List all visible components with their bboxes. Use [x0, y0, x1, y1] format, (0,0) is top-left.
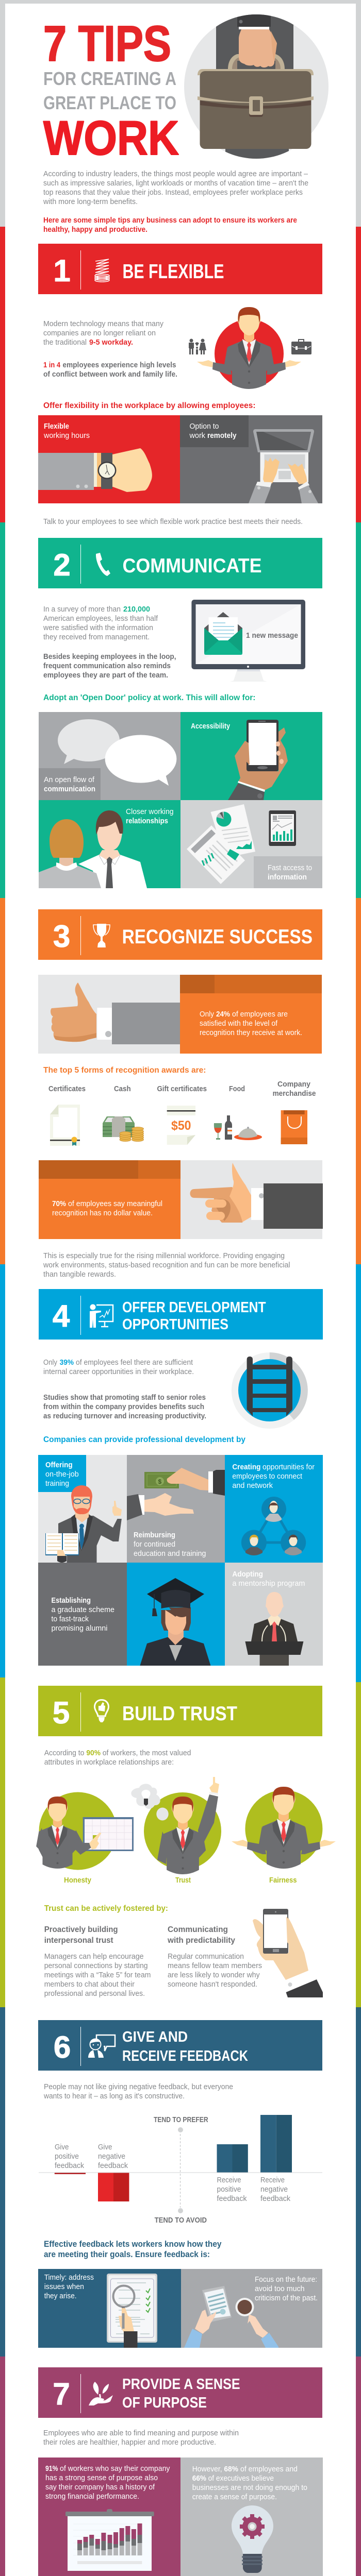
- text: negative feedback: wants to hear it – as long as it's constructive.: [43, 2092, 185, 2100]
- labels: honesty, trust, fairness: Fairness: [269, 1876, 297, 1885]
- text: 90% of workers: attributes in workplace relationships are:: [44, 1758, 174, 1767]
- panel: connect and network: and network: [232, 1482, 273, 1490]
- text: proactively building: Managers can help encourage: [44, 1953, 144, 1961]
- panel: fast access to information: Fast access to: [268, 864, 312, 872]
- text: survey: In a survey of more than: [43, 605, 121, 614]
- chart: feedback preferences: Receive: [217, 2176, 241, 2184]
- panel: open flow of communication: [39, 712, 180, 800]
- heading: effective feedback: [44, 2239, 222, 2259]
- panel: 70% stat: 70%: [52, 1200, 66, 1208]
- text: proactively building: personal connections by starting: [44, 1962, 148, 1970]
- panel: 68% stat and bulb: 66%: [192, 2475, 206, 2483]
- section 5 banner: [38, 1686, 322, 1736]
- intro text: [43, 170, 308, 206]
- text: millennial workforce: This is especially true for the rising millennial workforce. Providing engaging: [43, 1252, 285, 1260]
- panel: reimbursing: for continued: [134, 1540, 175, 1549]
- panel: 24% stat: Only: [200, 1010, 215, 1019]
- panel: 24% stat: 24%: [216, 1010, 230, 1019]
- text: 39% stat: of employees feel there are sufficient: [76, 1359, 193, 1367]
- section 2 banner: [38, 538, 322, 588]
- section 3: recognize success: [38, 909, 323, 1279]
- award labels: [48, 1080, 316, 1098]
- heading: open door policy: Adopt an 'Open Door' policy at work. This will allow for:: [43, 693, 256, 702]
- panel: 68% stat and bulb: businesses are not doing enough to: [192, 2484, 307, 2492]
- section 1 banner: 1: [53, 253, 71, 288]
- panel: accessibility: [180, 712, 322, 800]
- panel: 70% stat: recognition has no dollar value.: [52, 1209, 153, 1217]
- text: proactively building: members to chat about their: [44, 1980, 135, 1989]
- text: 39% stat: 39%: [60, 1359, 74, 1367]
- panel: timely: Timely: address: [44, 2274, 94, 2282]
- icon: certificate: [50, 1105, 80, 1146]
- icon: gift certificate: [167, 1106, 195, 1145]
- text: 1 in 4 employees: 1 in 4: [43, 361, 60, 369]
- panel: closer working relationships: relationships: [126, 817, 168, 825]
- award labels: Cash: [114, 1085, 131, 1093]
- panel: graduate scheme: to fast-track: [52, 1615, 89, 1623]
- panel: 24% stat: recognition they receive at work.: [200, 1029, 302, 1037]
- panel: focus on the future: [181, 2269, 322, 2348]
- title: WORK: [43, 111, 179, 165]
- illustration: monitor with message: 1 new message: [246, 632, 298, 640]
- text: besides keeping employees: frequent communication also reminds: [43, 662, 171, 670]
- chart: feedback preferences: negative: [260, 2185, 288, 2194]
- panel: closer working relationships: Closer working: [126, 808, 174, 816]
- panel: reimbursing: [127, 1455, 225, 1563]
- panel: thumbs up: [38, 975, 180, 1054]
- heading: offer flexibility: Offer flexibility in the workplace by allowing employees:: [43, 401, 256, 410]
- illustration: ladder in circle: [232, 1352, 308, 1429]
- panel: reimbursing: education and training: [134, 1550, 206, 1558]
- text: communicating with predictability: are less likely to wonder why: [168, 1971, 260, 1979]
- panel: work remotely: [180, 415, 322, 503]
- text: millennial workforce: work environments, status-based recognition and fun can be more beneficial: [43, 1261, 290, 1269]
- panel: focus on the future: avoid too much: [255, 2285, 305, 2293]
- section 7: provide a sense of purpose: [38, 2367, 323, 2576]
- text: survey: 210,000: [123, 605, 150, 614]
- chart: feedback preferences: feedback: [55, 2162, 85, 2170]
- section 3 banner: 3: [53, 919, 70, 954]
- section 2 banner: 2: [53, 548, 71, 582]
- panel: mentorship program: Adopting: [232, 1570, 263, 1579]
- panel: connect and network: Creating: [232, 1463, 260, 1471]
- panel: 70% stat: of employees say meaningful: [68, 1200, 162, 1208]
- text: modern technology: [43, 320, 164, 347]
- text: talk to your employees: Talk to your employees to see which flexible work practice best meets their needs.: [43, 518, 303, 526]
- section 5: build trust: [36, 1686, 336, 1998]
- text: communicating with predictability: Regular communication: [168, 1953, 244, 1961]
- text: modern technology: 9-5 workday.: [89, 338, 133, 347]
- panel: 91% stat and chart: of workers who say their company: [60, 2465, 170, 2473]
- illustration: trust: [131, 1777, 221, 1874]
- panel: 24% stat: of employees are: [232, 1010, 288, 1019]
- panel: on-the-job training: Offering: [45, 1461, 73, 1469]
- panel: 91% stat and chart: [38, 2458, 180, 2576]
- text: survey: [43, 605, 158, 641]
- icon: cash and coins: [103, 1116, 143, 1142]
- text: studies show: from within the company provides benefits such: [43, 1403, 204, 1411]
- panel: focus on the future: Focus on the future:: [255, 2276, 317, 2284]
- text: 39% stat: internal career opportunities in their workplace.: [43, 1368, 194, 1376]
- text: meaning and purpose: [43, 2429, 239, 2447]
- panel: closer working relationships: [39, 800, 180, 888]
- text: communicating with predictability: with predictability: [167, 1936, 235, 1945]
- section 4 banner: OPPORTUNITIES: [122, 1316, 228, 1333]
- text: modern technology: Modern technology means that many: [43, 320, 164, 328]
- panel: fast access to information: information: [268, 873, 307, 882]
- illustration: hand holding phone: [253, 1909, 323, 1997]
- section 2: communicate: [38, 538, 322, 888]
- award labels: Gift certificates: [157, 1085, 207, 1093]
- chart: feedback preferences: Give: [98, 2143, 112, 2151]
- chart: feedback preferences: TEND TO PREFER: [154, 2116, 208, 2124]
- section 7 banner: 7: [53, 2377, 70, 2411]
- text: millennial workforce: than tangible rewards.: [43, 1270, 116, 1279]
- heading: top 5 forms of recognition: The top 5 forms of recognition awards are:: [43, 1066, 206, 1075]
- text: proactively building: [44, 1925, 151, 1998]
- award labels: merchandise: [273, 1090, 316, 1098]
- panel: 91% stat and chart: say their company has a history of: [45, 2483, 155, 2492]
- panel: on-the-job training: [38, 1455, 127, 1563]
- text: studies show: Studies show that promoting staff to senior roles: [43, 1394, 206, 1402]
- panel: graduate scheme: [38, 1563, 127, 1666]
- text: studies show: [43, 1394, 206, 1420]
- section 1 banner: [38, 244, 322, 294]
- section 7 banner: PROVIDE A SENSE: [122, 2376, 240, 2393]
- illustration: monitor with message: [191, 600, 305, 682]
- panel: pointing hand: [180, 1160, 323, 1239]
- text: communicating with predictability: Communicating: [168, 1925, 228, 1934]
- panel: flexible working hours: Flexible: [44, 422, 69, 431]
- panel: timely: [38, 2269, 181, 2348]
- section 6 banner: RECEIVE FEEDBACK: [122, 2048, 248, 2064]
- panel: graduate scheme: a graduate scheme: [52, 1606, 114, 1614]
- section 4: offer development opportunities: [38, 1289, 323, 1666]
- panel: on-the-job training: training: [45, 1480, 69, 1488]
- panel: 68% stat and bulb: of employees and: [240, 2465, 298, 2473]
- panel: fast access to information: [180, 800, 322, 888]
- panel: 91% stat and chart: strong financial performance.: [45, 2493, 139, 2501]
- section 4 banner: OFFER DEVELOPMENT: [122, 1299, 266, 1316]
- chart: feedback preferences: feedback: [260, 2195, 291, 2203]
- text: 39% stat: Only: [43, 1359, 58, 1367]
- icon: family: [189, 339, 206, 354]
- text: communicating with predictability: someone hasn't responded.: [168, 1980, 257, 1989]
- text: negative feedback: [43, 2083, 233, 2100]
- labels: honesty, trust, fairness: Honesty: [64, 1876, 91, 1885]
- section 4 banner: [39, 1289, 323, 1340]
- panel: timely: they arise.: [44, 2292, 77, 2300]
- text: 90% of workers: 90%: [86, 1749, 101, 1757]
- labels: honesty, trust, fairness: Trust: [175, 1876, 191, 1885]
- text: 1 in 4 employees: employees experience high levels: [63, 361, 176, 369]
- panel: reimbursing: $: [158, 1478, 162, 1485]
- intro text: with more long-term benefits.: [43, 198, 138, 206]
- chart: feedback preferences: positive: [217, 2185, 241, 2194]
- chart: feedback preferences: Give: [55, 2143, 69, 2151]
- text: studies show: as reducing turnover and increasing productivity.: [43, 1412, 206, 1420]
- intro highlight: healthy, happy and productive.: [43, 226, 147, 234]
- section 1: be flexible: [38, 244, 322, 526]
- icon: gift certificate: $50: [171, 1118, 191, 1133]
- section 6 banner: [38, 2020, 322, 2071]
- text: 1 in 4 employees: of conflict between work and family life.: [43, 370, 177, 379]
- section 7 banner: OF PURPOSE: [122, 2395, 207, 2411]
- panel: 68% stat and bulb: of executives believe: [208, 2475, 274, 2483]
- chart: feedback preferences: negative: [98, 2153, 125, 2161]
- section 3 banner: RECOGNIZE SUCCESS: [122, 926, 313, 948]
- icon: shopping bag: [281, 1110, 307, 1144]
- panel: open flow of communication: communication: [44, 785, 95, 793]
- text: communicating with predictability: [167, 1925, 262, 1989]
- illustration: fairness: [232, 1787, 336, 1869]
- section 3 banner: [38, 909, 322, 960]
- laptop: [253, 429, 314, 452]
- chart: feedback preferences: Receive: [260, 2176, 285, 2184]
- intro text: According to industry leaders, the things most people would agree are important –: [43, 170, 308, 178]
- panel: connect and network: employees to connect: [232, 1472, 302, 1481]
- panel: open flow of communication: An open flow of: [44, 776, 95, 784]
- title: 7 TIPS: [43, 15, 171, 72]
- text: modern technology: the traditional: [43, 338, 87, 347]
- stacked bar chart on screen: [65, 2509, 154, 2571]
- text: millennial workforce: [43, 1252, 290, 1279]
- section 6 banner: GIVE AND: [122, 2029, 188, 2045]
- panel: graduate scheme: promising alumni: [52, 1624, 107, 1633]
- section 6 banner: 6: [54, 2030, 71, 2064]
- section 1 banner: BE FLEXIBLE: [123, 261, 224, 283]
- text: 39% stat: [43, 1359, 194, 1376]
- text: communicating with predictability: means fellow team members: [168, 1962, 262, 1970]
- icon: briefcase: [291, 339, 311, 354]
- panel: mentorship program: a mentorship program: [232, 1580, 305, 1588]
- award labels: Certificates: [48, 1085, 86, 1093]
- intro text: such as impressive salaries, light workloads or months of vacation time – aren't the: [43, 179, 308, 188]
- labels: honesty, trust, fairness: [64, 1876, 297, 1885]
- title: [43, 15, 179, 165]
- section 7 banner: [38, 2367, 322, 2418]
- text: proactively building: interpersonal trust: [44, 1936, 113, 1945]
- text: proactively building: professional and personal lives.: [44, 1990, 145, 1998]
- text: 90% of workers: [44, 1749, 191, 1767]
- panel: focus on the future: criticism of the past.: [255, 2294, 318, 2302]
- panel: 68% stat and bulb: However,: [192, 2465, 222, 2473]
- title: FOR CREATING A: [43, 68, 176, 89]
- text: survey: American employees, less than half: [43, 615, 158, 623]
- intro text: top reasons that they value their jobs. Instead, employees prefer workplace perks: [43, 189, 303, 197]
- text: besides keeping employees: [43, 653, 176, 680]
- chart: feedback preferences: [39, 2115, 322, 2225]
- panel: work remotely: remotely: [207, 432, 236, 440]
- section 6: give and receive feedback: [38, 2020, 322, 2348]
- panel: graduate scheme: Establishing: [52, 1597, 91, 1605]
- icon: hand holding briefcase: [184, 10, 329, 160]
- section 4 banner: 4: [53, 1299, 70, 1333]
- panel: 24% stat: [180, 975, 322, 1054]
- intro highlight: [43, 216, 297, 234]
- intro highlight: Here are some simple tips any business can adopt to ensure its workers are: [43, 216, 297, 225]
- text: meaning and purpose: Employees who are able to find meaning and purpose within: [43, 2429, 239, 2437]
- text: besides keeping employees: Besides keeping employees in the loop,: [43, 653, 176, 661]
- icon: food and wine: [214, 1115, 262, 1140]
- title: GREAT PLACE TO: [43, 92, 176, 113]
- panel: flexible working hours: working hours: [43, 432, 90, 440]
- heading: trust fostered: Trust can be actively fostered by:: [44, 1904, 168, 1913]
- panel: 68% stat and bulb: 68%: [224, 2465, 238, 2473]
- award labels: Food: [229, 1085, 245, 1093]
- panel: connect and network: opportunities for: [262, 1463, 315, 1471]
- panel: 91% stat and chart: has a strong sense of purpose also: [45, 2474, 158, 2482]
- panel: mentorship program: [225, 1563, 323, 1666]
- panel: 68% stat and bulb: [180, 2458, 323, 2576]
- heading: effective feedback: are meeting their goals. Ensure feedback is:: [44, 2249, 210, 2259]
- chart: feedback preferences: TEND TO AVOID: [155, 2216, 207, 2225]
- panel: flexible working hours: [38, 415, 180, 503]
- illustration: honesty: [36, 1792, 134, 1870]
- text: negative feedback: People may not like giving negative feedback, but everyone: [44, 2083, 233, 2091]
- illustration: man balancing family and work: [189, 307, 311, 389]
- panel: 91% stat and chart: 91%: [45, 2465, 58, 2473]
- chart: feedback preferences: feedback: [217, 2195, 247, 2203]
- text: 1 in 4 employees: [43, 361, 177, 379]
- text: proactively building: Proactively building: [44, 1925, 118, 1934]
- text: survey: were satisfied with the information: [43, 624, 153, 632]
- section 5 banner: BUILD TRUST: [122, 1703, 237, 1725]
- panel: connect and network: [225, 1455, 323, 1563]
- text: survey: they received from management.: [43, 633, 150, 641]
- panel: timely: issues when: [44, 2283, 84, 2291]
- panel: work remotely: Option to: [190, 422, 219, 431]
- panel: graduate illustration: [127, 1563, 225, 1666]
- panel: on-the-job training: on-the-job: [45, 1470, 79, 1479]
- text: 90% of workers: of workers, the most valued: [103, 1749, 191, 1757]
- icon: light bulb with gear: [232, 2505, 273, 2573]
- heading: professional development: Companies can provide professional development by: [43, 1435, 245, 1444]
- panel: 70% stat: [39, 1160, 180, 1239]
- text: modern technology: companies are no longer reliant on: [43, 329, 156, 337]
- text: 90% of workers: According to: [44, 1749, 84, 1757]
- panel: reimbursing: Reimbursing: [134, 1531, 175, 1539]
- award labels: Company: [277, 1080, 310, 1089]
- panel: 68% stat and bulb: create a sense of purpose.: [192, 2493, 277, 2501]
- text: proactively building: meetings with a “Take 5” for team: [44, 1971, 151, 1979]
- section 5 banner: 5: [53, 1696, 70, 1730]
- panel: 24% stat: satisfied with the level of: [200, 1020, 278, 1028]
- panel: work remotely: work: [189, 432, 206, 440]
- text: besides keeping employees: employees they are part of the team.: [43, 671, 168, 680]
- chart: feedback preferences: positive: [55, 2153, 79, 2161]
- heading: effective feedback: Effective feedback lets workers know how they: [44, 2239, 222, 2249]
- text: meaning and purpose: their roles are healthier, happier and more productive.: [43, 2438, 216, 2447]
- section 2 banner: COMMUNICATE: [123, 555, 262, 577]
- chart: feedback preferences: feedback: [98, 2162, 128, 2170]
- panel: accessibility: Accessibility: [191, 722, 230, 731]
